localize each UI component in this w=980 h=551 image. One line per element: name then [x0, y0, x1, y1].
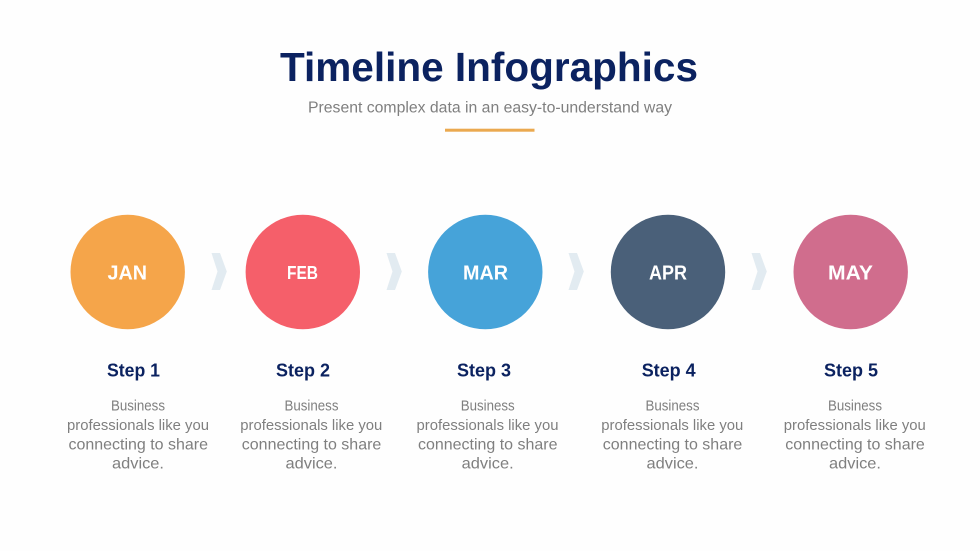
description: step 3: advice. — [462, 456, 514, 473]
circle: MAR: MAR — [463, 262, 509, 284]
heading: Step 2: Step 2 — [276, 360, 330, 380]
heading: Step 3: Step 3 — [457, 360, 511, 380]
description: step 3: Business — [461, 398, 515, 415]
description: step 3: connecting to share — [418, 436, 558, 454]
arrow: Mar to Apr — [568, 253, 584, 290]
description: step 1: connecting to share — [68, 436, 208, 454]
arrow: Feb to Mar — [386, 253, 402, 290]
circle: FEB — [246, 215, 360, 329]
description: step 2: professionals like you — [240, 417, 382, 434]
circle: FEB: FEB — [287, 263, 318, 283]
description: step 5 — [784, 398, 926, 473]
title accent line — [445, 129, 534, 132]
description: step 5: advice. — [829, 456, 881, 473]
description: step 5: professionals like you — [784, 417, 926, 434]
circle: APR — [611, 215, 725, 329]
step 2 column — [240, 215, 382, 473]
description: step 1: professionals like you — [67, 417, 209, 434]
circle: APR: APR — [649, 262, 687, 284]
step 5 column — [784, 215, 926, 473]
description: step 2: Business — [284, 398, 338, 415]
description: step 4: advice. — [646, 456, 698, 473]
description: step 3 — [416, 398, 558, 473]
description: step 1: advice. — [112, 456, 164, 473]
circle: MAY: MAY — [828, 262, 874, 284]
step 4 column — [601, 215, 743, 473]
description: step 1: Business — [111, 398, 165, 415]
circle: MAY — [794, 215, 908, 329]
circle: JAN: JAN — [108, 262, 147, 284]
description: step 1 — [67, 398, 209, 473]
circle: MAR — [428, 215, 542, 329]
step 3 column — [416, 215, 558, 473]
description: step 4: professionals like you — [601, 417, 743, 434]
step 1 column — [67, 215, 209, 473]
arrow: Apr to May — [752, 253, 767, 290]
description: step 5: Business — [828, 398, 882, 415]
subtitle: Present complex data in an easy-to-understand way — [308, 100, 672, 116]
description: step 2: advice. — [286, 456, 338, 473]
heading: Step 1: Step 1 — [107, 360, 160, 380]
description: step 4: connecting to share — [603, 436, 742, 454]
circle: JAN — [70, 215, 185, 329]
description: step 3: professionals like you — [416, 417, 558, 434]
description: step 5: connecting to share — [785, 436, 925, 454]
description: step 2 — [240, 398, 382, 473]
description: step 4: Business — [646, 398, 700, 415]
heading: Step 5: Step 5 — [824, 360, 878, 380]
description: step 4 — [601, 398, 743, 473]
heading: Step 4: Step 4 — [642, 360, 696, 380]
arrow: Jan to Feb — [212, 253, 227, 290]
title: Timeline Infographics — [280, 44, 698, 90]
description: step 2: connecting to share — [242, 436, 381, 454]
